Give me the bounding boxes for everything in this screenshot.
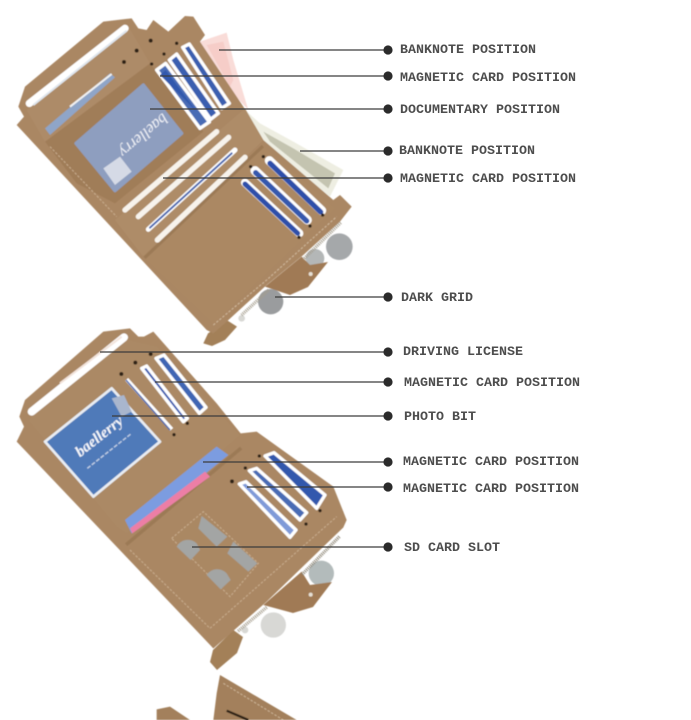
callout: magnetic card position 2 [163, 172, 576, 187]
wallet: third view, cropped at bottom [157, 675, 297, 720]
zipper puller [210, 630, 243, 670]
brand: baellerry [115, 110, 171, 161]
zipper tab [265, 257, 328, 295]
stitching [130, 517, 337, 628]
callout: driving license: DRIVING LICENSE [403, 345, 523, 360]
callout: banknote position: BANKNOTE POSITION [400, 43, 536, 58]
callout: banknote position 2 [300, 144, 535, 159]
lower right panel [125, 433, 343, 648]
fold band [115, 108, 263, 257]
top long slot [32, 337, 124, 412]
upper left panel [28, 340, 240, 533]
stitching [50, 147, 117, 217]
callout: magnetic card position 5 [247, 482, 579, 497]
callout: banknote position 2: BANKNOTE POSITION [399, 144, 535, 159]
diagonal card [125, 447, 228, 533]
QR code [112, 395, 132, 417]
callout: dark grid: DARK GRID [401, 291, 473, 306]
coins [258, 233, 353, 314]
left panel shading [45, 63, 203, 203]
right card slots [230, 453, 325, 537]
document window [76, 85, 182, 191]
brand: baellerry [72, 412, 127, 460]
second slot [45, 73, 115, 135]
callout: magnetic card position: MAGNETIC CARD POSITION [400, 71, 576, 86]
callout: SD card slot: SD CARD SLOT [404, 541, 500, 556]
callout: magnetic card position 2: MAGNETIC CARD POSITION [400, 172, 576, 187]
lower slots [125, 132, 245, 240]
zipper [303, 223, 341, 259]
callout: photo bit: PHOTO BIT [404, 410, 476, 425]
SD card slot panel [172, 512, 258, 597]
magnetic card slots [157, 44, 229, 128]
callout: documentary position: DOCUMENTARY POSITION [400, 103, 560, 118]
callout: photo bit [112, 410, 476, 425]
wallet body [17, 16, 352, 333]
right card slots [245, 155, 324, 239]
banknote: green [245, 110, 343, 197]
callout: SD card slot [192, 541, 500, 556]
zipper puller [203, 320, 237, 346]
wallet: upper open view [17, 16, 353, 346]
callout: dark grid [275, 291, 473, 306]
callout: magnetic card position 4 [203, 455, 579, 470]
wallet: lower open view [17, 328, 347, 670]
magnetic card slots [119, 352, 206, 436]
top long slot [29, 28, 125, 103]
callout: magnetic card position [160, 71, 576, 86]
callout: driving license [100, 345, 523, 360]
photo window [45, 388, 160, 497]
callout: magnetic card position 3: MAGNETIC CARD POSITION [404, 376, 580, 391]
coins [261, 561, 334, 638]
wallet body [17, 328, 347, 648]
zipper tab [263, 572, 332, 613]
callout: magnetic card position 5: MAGNETIC CARD POSITION [403, 482, 579, 497]
upper flap highlight [27, 27, 150, 142]
callout: banknote position [219, 43, 536, 58]
QR code [103, 157, 132, 185]
callout: documentary position [150, 103, 560, 118]
callout: magnetic card position 4: MAGNETIC CARD POSITION [403, 455, 579, 470]
zipper [302, 537, 339, 575]
banknote: pink [200, 33, 248, 110]
lower right panel [143, 145, 335, 323]
pen holes [122, 39, 178, 66]
callout: magnetic card position 3 [155, 376, 580, 391]
